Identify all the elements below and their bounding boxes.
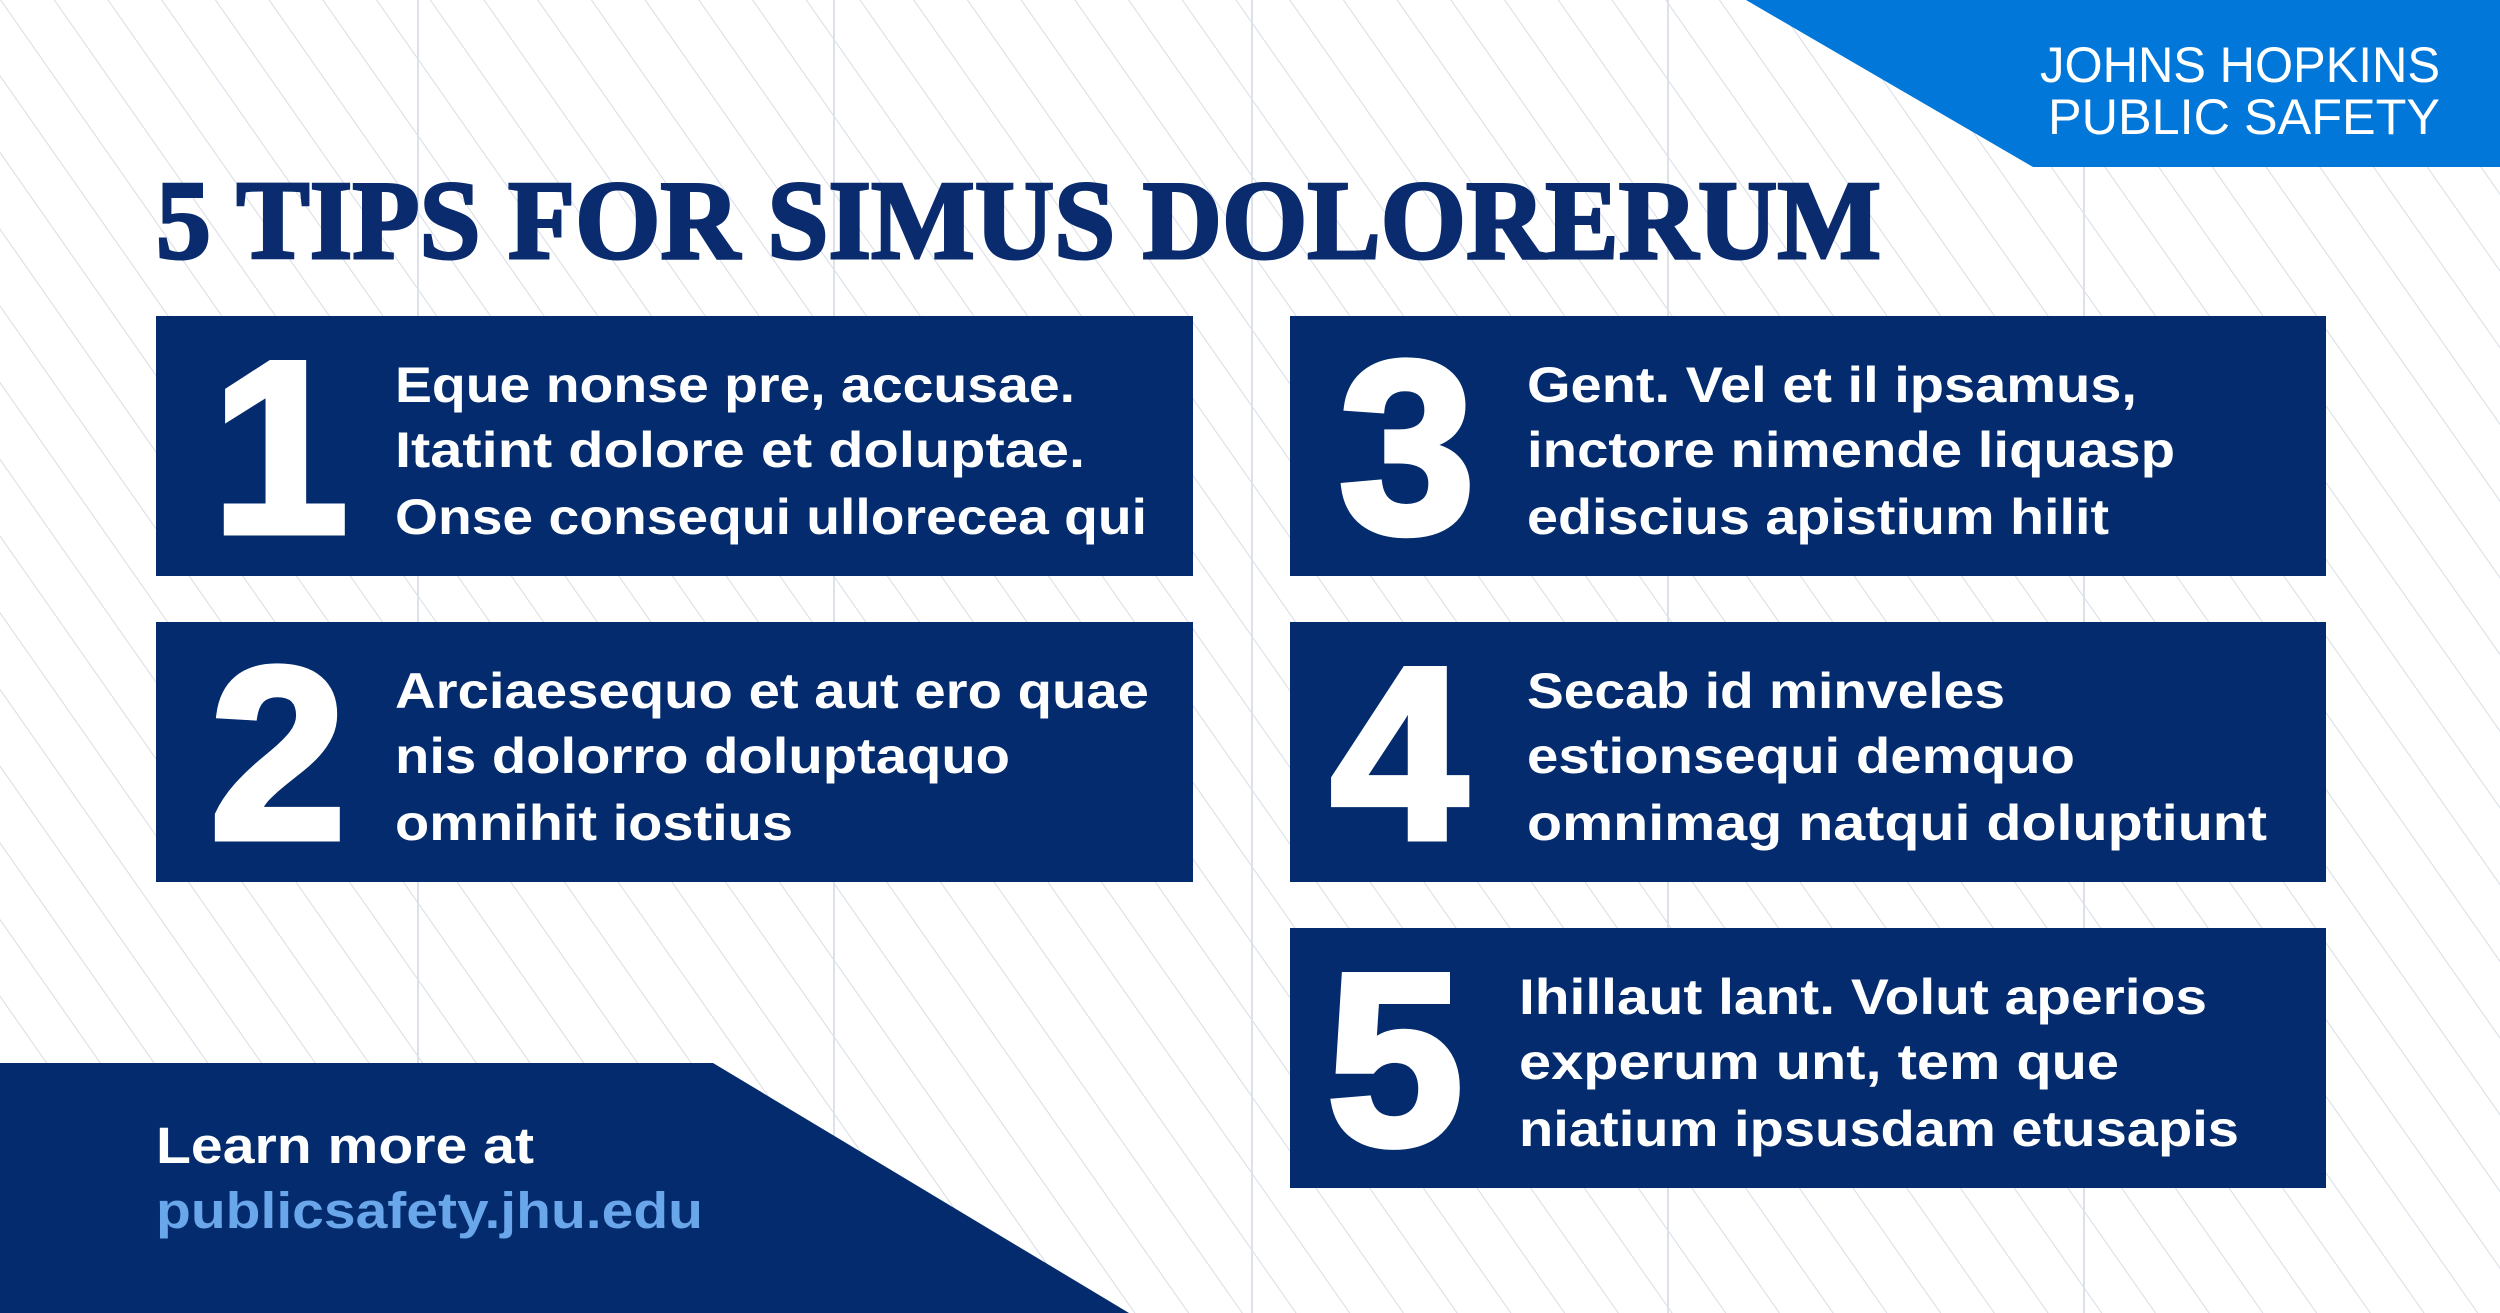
logo text: PUBLIC SAFETY [2048, 89, 2440, 145]
url: publicsafety.jhu.edu [156, 1182, 703, 1239]
tip 2: Arciaesequo et aut ero quae [395, 663, 1149, 719]
tip 1 [156, 310, 1193, 584]
tip 1: Onse consequi ullorecea qui [395, 489, 1147, 545]
tip 4 [1290, 616, 2326, 890]
tip 1: Eque nonse pre, accusae. [395, 357, 1075, 413]
tip 2: omnihit iostius [395, 795, 793, 851]
tip 5: niatium ipsusdam etusapis [1519, 1101, 2239, 1157]
title: 5 TIPS FOR SIMUS DOLORERUM [156, 159, 1881, 283]
tip 2: 2 [210, 616, 346, 890]
tip 3: ediscius apistium hilit [1527, 489, 2109, 545]
header banner [1746, 0, 2500, 167]
footer panel [0, 1063, 1129, 1313]
tip 4: omnimag natqui doluptiunt [1527, 795, 2267, 851]
tip 4: Secab id minveles [1527, 663, 2005, 719]
tip 2: nis dolorro doluptaquo [395, 728, 1010, 784]
learn more text: Learn more at [156, 1117, 534, 1174]
tip 5 [1290, 922, 2326, 1196]
tip 3 [1290, 310, 2326, 584]
tip 3: inctore nimende liquasp [1527, 422, 2175, 478]
tip 1: Itatint dolore et doluptae. [395, 422, 1085, 478]
logo text [2040, 37, 2440, 145]
tip 1: 1 [212, 310, 348, 584]
tip 5: Ihillaut lant. Volut aperios [1519, 969, 2207, 1025]
tip 5: 5 [1327, 922, 1463, 1196]
tip 4: 4 [1331, 616, 1467, 890]
logo text: JOHNS HOPKINS [2040, 37, 2440, 93]
tip 5: experum unt, tem que [1519, 1034, 2119, 1090]
tip 3: Gent. Vel et il ipsamus, [1527, 357, 2137, 413]
tip 3: 3 [1339, 310, 1475, 584]
tip 2 [156, 616, 1193, 890]
tip 4: estionsequi demquo [1527, 728, 2075, 784]
